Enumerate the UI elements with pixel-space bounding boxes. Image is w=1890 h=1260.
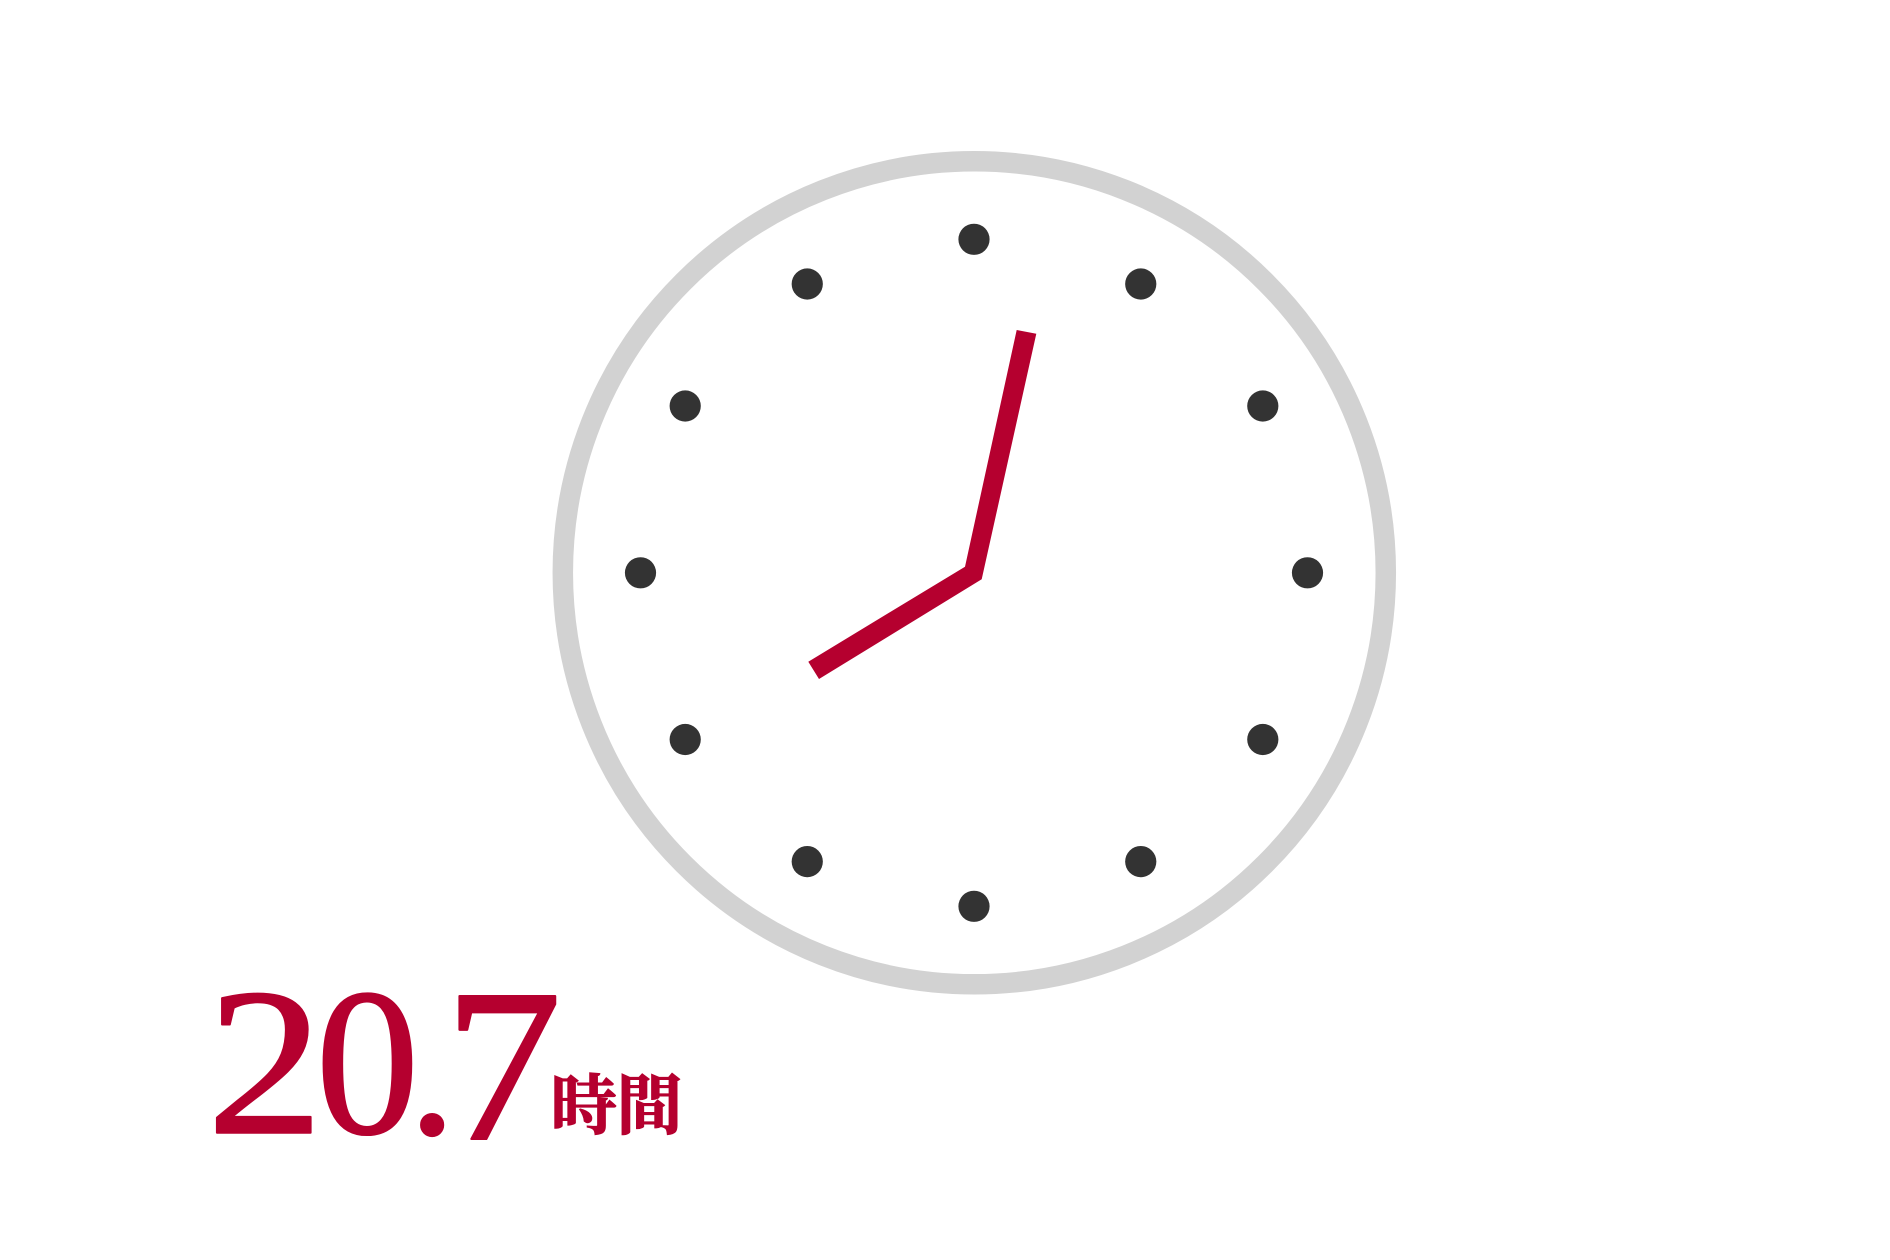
number: 2 (207, 945, 323, 1178)
hour markers (625, 224, 1323, 922)
clock (563, 161, 1386, 984)
number: 7 (444, 945, 562, 1187)
number (207, 945, 562, 1187)
number: . (408, 966, 456, 1175)
unit: 時間 (551, 1070, 683, 1144)
number: 0 (316, 947, 419, 1179)
clock face ring (563, 161, 1386, 984)
duration value (207, 945, 683, 1187)
clock hands (808, 330, 1036, 679)
